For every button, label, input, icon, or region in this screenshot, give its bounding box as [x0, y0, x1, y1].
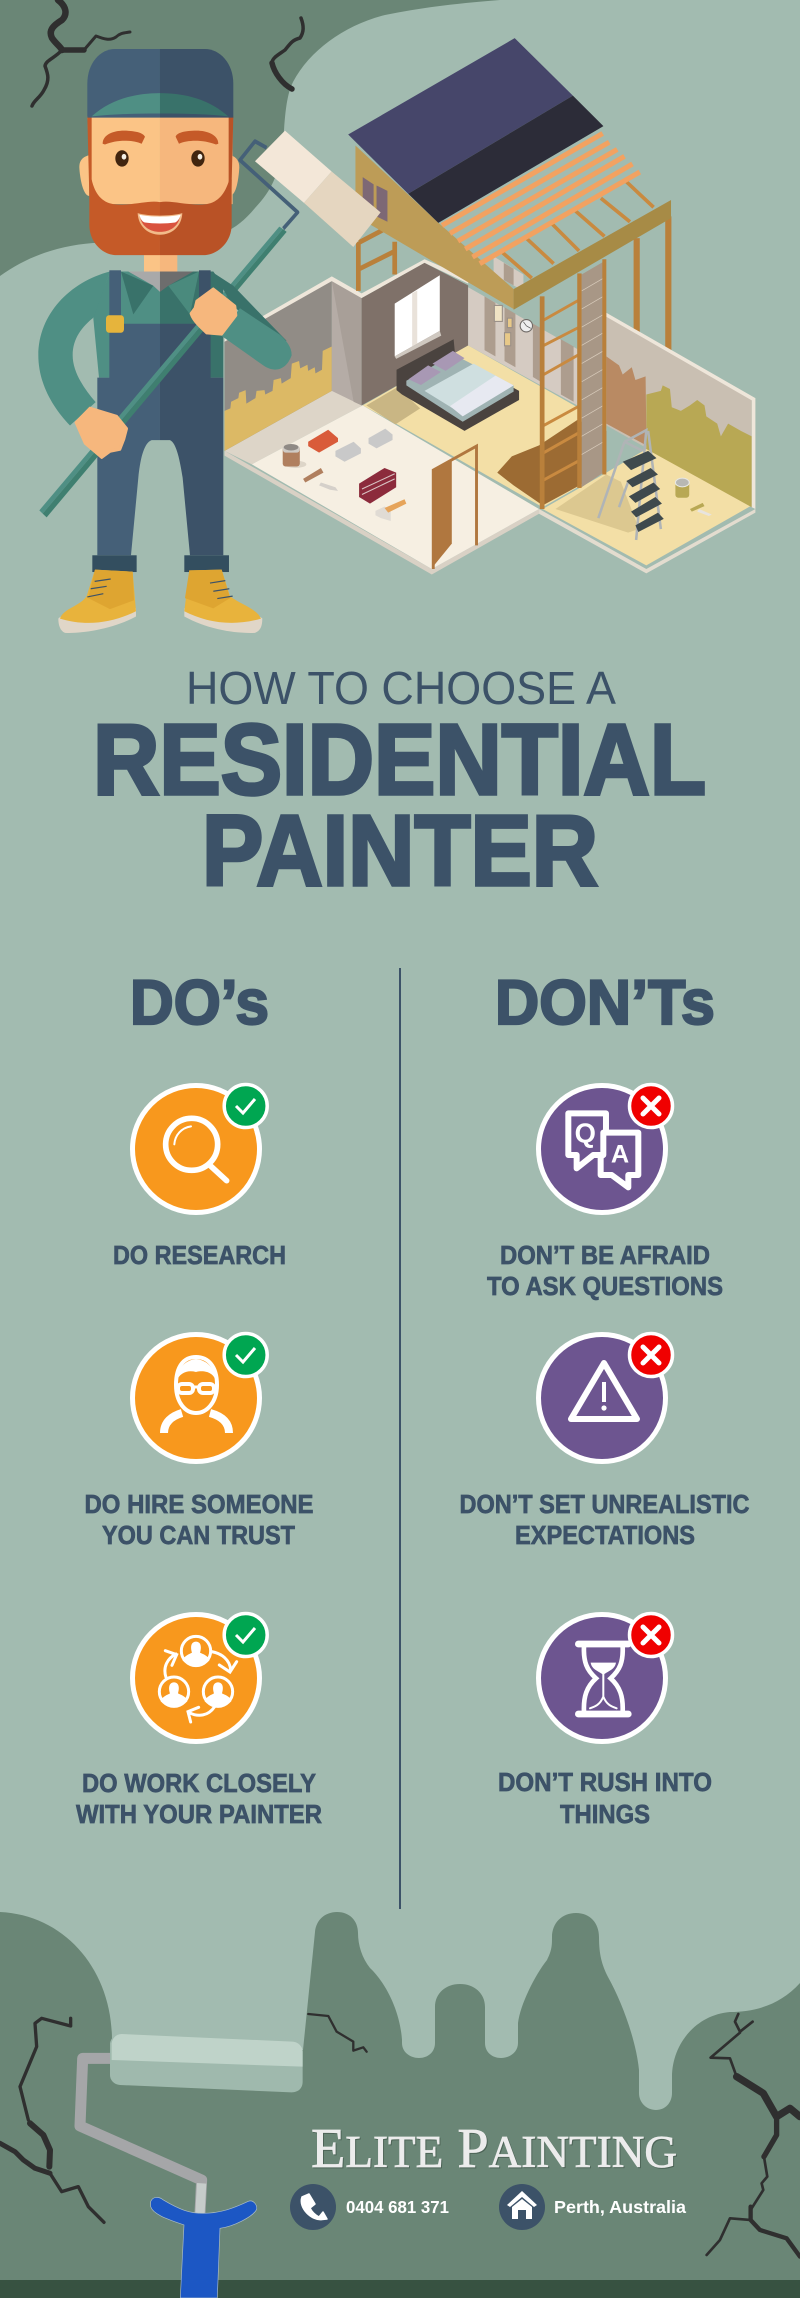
icon: question and answer bubbles: Q — [575, 1118, 596, 1149]
roller frame — [240, 141, 298, 229]
bed — [397, 339, 519, 431]
neck — [144, 253, 177, 272]
rafters — [442, 133, 654, 278]
badge: cross — [630, 1334, 672, 1376]
icon: warning triangle — [571, 1363, 637, 1419]
bottom paint drips — [0, 1912, 800, 2298]
location contact — [499, 2184, 686, 2230]
label: WITH YOUR PAINTER — [76, 1799, 322, 1829]
left hand — [76, 408, 127, 457]
heading: dos: DO’s — [130, 968, 269, 1038]
striped wall with pictures and clock — [468, 256, 577, 405]
label: EXPECTATIONS — [515, 1520, 695, 1550]
house illustration — [225, 38, 755, 574]
mouth — [138, 213, 182, 235]
label: DON’T RUSH INTO — [498, 1767, 712, 1797]
phone contact — [290, 2184, 449, 2230]
label — [498, 1767, 712, 1829]
badge: cross — [630, 1084, 672, 1128]
attic gable wall — [355, 145, 514, 309]
item: do research — [113, 1084, 286, 1270]
bedroom wall and window — [362, 263, 468, 405]
label — [84, 1489, 314, 1550]
right hand — [191, 289, 236, 334]
label: YOU CAN TRUST — [102, 1520, 295, 1550]
badge: check — [224, 1084, 267, 1128]
top dark paint blob — [0, 0, 500, 276]
paint roller — [80, 2034, 303, 2298]
house slab — [225, 345, 755, 574]
title line 1: HOW TO CHOOSE A — [186, 662, 616, 714]
roller head — [255, 131, 381, 247]
crack bottom right — [707, 2014, 800, 2257]
badge: check — [224, 1334, 267, 1376]
label: THINGS — [560, 1799, 650, 1829]
label: DON’T SET UNREALISTIC — [460, 1489, 750, 1519]
left boot — [58, 570, 136, 633]
phone contact: 0404 681 371 — [346, 2197, 449, 2217]
label: DO RESEARCH — [113, 1240, 286, 1270]
right arm sleeve — [213, 273, 292, 370]
title line 3: PAINTER — [202, 795, 598, 907]
item: do hire someone — [84, 1334, 314, 1550]
item: do work closely — [76, 1614, 322, 1829]
item: dont set unrealistic — [460, 1334, 750, 1550]
tools on floor — [283, 429, 406, 521]
icon: house — [507, 2191, 537, 2219]
rear posts — [634, 216, 671, 351]
item: dont be afraid — [487, 1084, 723, 1301]
label: DO HIRE SOMEONE — [84, 1489, 314, 1519]
roof — [348, 38, 603, 223]
logo: ELITE PAINTING — [311, 2118, 677, 2180]
heading: donts: DON’Ts — [495, 968, 715, 1038]
crack top left — [32, 0, 303, 106]
label — [76, 1768, 322, 1829]
cracks bottom left — [0, 2014, 367, 2222]
left room walls — [225, 259, 468, 451]
eyebrows — [103, 131, 218, 145]
left frame posts — [358, 224, 395, 291]
face — [87, 116, 233, 204]
ears — [79, 155, 239, 196]
roller highlight — [112, 2034, 303, 2067]
centre divider — [399, 968, 401, 1909]
label: TO ASK QUESTIONS — [487, 1271, 723, 1301]
icon: magnifying glass — [166, 1118, 227, 1181]
icon: team cycle — [159, 1636, 237, 1722]
badge: check — [224, 1614, 267, 1656]
title line 2: RESIDENTIAL — [93, 704, 706, 816]
label — [487, 1240, 723, 1301]
overalls — [92, 270, 229, 572]
blue grip — [151, 2197, 257, 2298]
badge: cross — [630, 1614, 672, 1656]
step ladder — [598, 430, 664, 540]
icon: phone — [301, 2194, 327, 2220]
eyes — [115, 150, 205, 167]
label: DO WORK CLOSELY — [82, 1768, 316, 1798]
shirt torso — [93, 272, 223, 378]
roller sleeve — [110, 2034, 303, 2092]
location contact: Perth, Australia — [554, 2197, 686, 2217]
title — [93, 662, 706, 907]
painter character — [38, 49, 381, 633]
label: DON’T BE AFRAID — [500, 1240, 710, 1270]
bottom strip — [0, 2280, 800, 2298]
paint can and small roller — [675, 478, 712, 516]
icon: question and answer bubbles: A — [611, 1141, 629, 1169]
door — [433, 446, 477, 569]
cap — [87, 49, 233, 118]
left arm — [38, 272, 110, 425]
icon: question and answer bubbles — [568, 1113, 638, 1187]
icon: hourglass — [578, 1644, 628, 1714]
front posts and ladder — [540, 259, 606, 509]
roller handle frame — [80, 2058, 202, 2213]
attic front beam — [514, 200, 671, 310]
pole — [39, 227, 287, 517]
item: dont rush — [498, 1614, 712, 1829]
beard — [89, 180, 232, 255]
right boot — [184, 570, 262, 633]
right room wall — [606, 313, 755, 509]
icon: person with glasses — [164, 1357, 229, 1433]
label — [460, 1489, 750, 1550]
